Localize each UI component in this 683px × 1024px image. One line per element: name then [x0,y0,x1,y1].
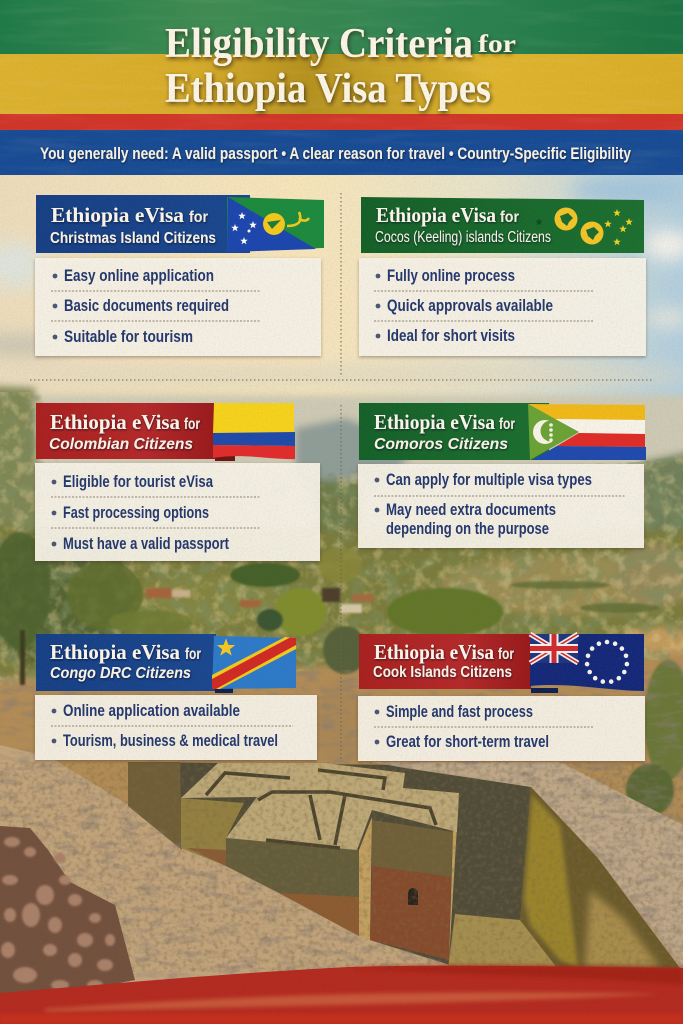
header ribbon [361,197,644,253]
stone mottling [0,762,683,972]
header text: Comoros Citizens [374,436,508,453]
criteria list [358,696,645,761]
dotted separators [30,193,654,760]
header text [50,640,201,682]
roof grooves [206,770,436,848]
title: for [478,31,516,58]
criteria list: Great for short-term travel [386,733,549,751]
panel: Cook Islands [358,634,645,761]
header text: Ethiopia eVisa [50,640,180,664]
criteria list: Suitable for tourism [64,328,193,346]
flag: Colombia [213,403,295,461]
criteria list: Can apply for multiple visa types [386,471,592,489]
front wall [226,838,359,936]
header text: Christmas Island Citizens [50,230,216,247]
title [165,21,516,112]
header text [373,640,514,681]
front wall base [279,893,359,936]
flag emblems [535,208,633,245]
header ribbon [359,634,531,689]
header text: Congo DRC Citizens [50,665,191,682]
criteria list: Quick approvals available [387,297,553,315]
right trench wall [520,787,680,968]
top banner with flag stripes [0,0,683,175]
right edge [449,793,459,960]
header text: Colombian Citizens [49,436,193,453]
criteria list [359,258,646,356]
panel: Christmas Island [35,195,324,356]
sunlit rock at wall base [585,890,660,968]
header text: Ethiopia eVisa [51,203,185,227]
criteria list: Must have a valid passport [63,535,229,553]
right rock top [372,762,683,965]
criteria list: Fast processing options [63,504,209,522]
panel: Colombia [35,403,320,561]
header text: Ethiopia eVisa [374,410,495,434]
criteria list: Basic documents required [64,297,229,315]
header text: for [185,646,201,663]
header text: Ethiopia eVisa [376,203,496,227]
trench back wall [130,762,531,965]
yellow streak on wall [524,795,578,968]
header text: for [500,209,519,226]
criteria list: Online application available [63,702,240,720]
header ribbon [36,403,217,459]
criteria list: Fully online process [387,267,515,285]
rock streaks [0,660,683,1000]
flag: Cook Islands [530,634,644,693]
panel: Cocos (Keeling) Islands [359,197,646,356]
criteria list [35,258,321,356]
bottom red band [0,966,683,1024]
clouds [0,176,683,384]
flag: Christmas Island [227,197,324,252]
header text: Ethiopia eVisa [374,640,494,664]
church of Saint George [181,763,459,960]
criteria list: depending on the purpose [386,520,549,538]
yellow stripe [0,54,683,114]
header text: for [498,646,514,663]
criteria list: Eligible for tourist eVisa [63,473,214,491]
header text: for [499,416,515,433]
title: Ethiopia Visa Types [165,66,491,112]
criteria list [35,695,317,760]
sunlit foliage [0,392,683,692]
header text: for [189,209,208,226]
flag: Congo DRC [212,636,296,693]
lower left arm [187,848,226,866]
header text [49,410,200,453]
header ribbon [359,403,549,460]
panel: Congo DRC [35,634,317,760]
header text: Cocos (Keeling) islands Citizens [375,229,551,246]
foliage mottling [0,392,683,692]
header ribbon [36,195,250,253]
criteria list [35,463,320,561]
olive rock behind church [128,762,182,850]
header text [374,410,515,453]
title: Eligibility Criteria [165,21,473,67]
criteria list: May need extra documents [386,501,556,519]
header text: Cook Islands Citizens [373,664,512,681]
sky [0,170,683,430]
header ribbon [36,634,216,691]
criteria list [358,464,644,548]
red stripe [0,114,683,130]
criteria list: Easy online application [64,267,214,285]
criteria list: Simple and fast process [386,703,533,721]
header text: Ethiopia eVisa [50,410,180,434]
right wall upper [372,820,453,877]
header text: for [184,416,200,433]
header text [375,203,551,246]
distant hills and hazy valley [0,385,683,560]
flag: Comoros [528,404,646,460]
foreground earth [0,625,683,850]
painted texture [0,0,683,175]
right wall lower [370,866,451,960]
header text [50,203,216,247]
roof cross [181,763,459,850]
window [408,888,418,905]
trench floor [448,914,558,968]
blue stripe [0,130,683,175]
green stripe [0,0,683,54]
criteria list: Ideal for short visits [387,327,515,345]
pillar edge [359,817,372,940]
left arm wall [181,798,244,866]
panel: Comoros [358,403,646,548]
rock pile [0,826,135,995]
valley with vegetation [0,525,683,680]
trees and village [0,532,683,816]
rock slab left [0,745,444,1000]
criteria list: Tourism, business & medical travel [63,732,278,750]
